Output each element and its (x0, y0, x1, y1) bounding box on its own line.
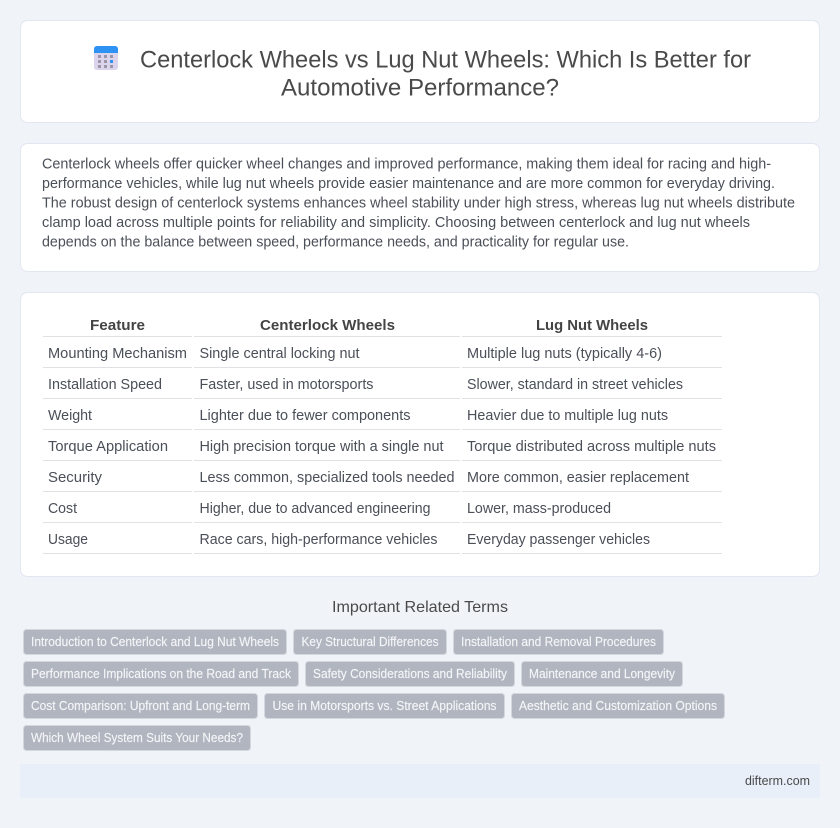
chip (24, 630, 286, 654)
footer: difterm.com (745, 773, 810, 788)
chip: Maintenance and Longevity (529, 667, 676, 681)
table row: cost: Lower, mass-produced (467, 501, 611, 517)
table header: Centerlock Wheels (260, 318, 395, 334)
table row: security: Security (48, 470, 103, 486)
icon: calendar (94, 46, 118, 70)
chip: Performance Implications on the Road and Track (31, 667, 292, 681)
panel: intro text: depends on the balance between speed, performance needs, and practicality for regular use. (42, 234, 629, 250)
chip: Installation and Removal Procedures (461, 635, 656, 649)
related term chips (24, 630, 724, 750)
table row: torque application: Torque distributed across multiple nuts (467, 439, 716, 455)
panel: intro text: clamp load across multiple points for reliability and simplicity. Choosing between centerlock and lug nut wheels (42, 215, 750, 231)
title: Automotive Performance? (281, 74, 559, 102)
table row: security (48, 470, 689, 486)
chip: Safety Considerations and Reliability (313, 667, 508, 681)
chip: Key Structural Differences (302, 635, 438, 649)
footer (20, 764, 820, 798)
table row: installation speed: Slower, standard in street vehicles (467, 377, 683, 393)
panel: intro text: Centerlock wheels offer quicker wheel changes and improved performance, making them ideal for racing and high- (42, 156, 771, 172)
table row: mounting mechanism (48, 346, 662, 362)
panel: title header (20, 20, 820, 122)
table row: usage: Usage (48, 532, 88, 548)
table row: mounting mechanism: Mounting Mechanism (48, 346, 187, 362)
panel: intro text: performance vehicles, while lug nut wheels provide easier maintenance and are more common for everyday driving. (42, 176, 775, 192)
chip (24, 694, 258, 718)
table row: cost: Cost (48, 501, 77, 517)
heading: important related terms: Important Related Terms (332, 599, 508, 616)
table row: mounting mechanism: Single central locking nut (200, 346, 360, 362)
table row: torque application (48, 439, 716, 455)
chip: Which Wheel System Suits Your Needs? (31, 731, 243, 745)
title: Centerlock Wheels vs Lug Nut Wheels: Which Is Better for (140, 46, 751, 74)
table row: cost: Higher, due to advanced engineering (200, 501, 430, 517)
chip: Use in Motorsports vs. Street Applications (272, 699, 496, 713)
table row: usage (48, 532, 650, 548)
panel: comparison table (20, 292, 820, 576)
table header: Lug Nut Wheels (536, 318, 648, 334)
table row: weight: Heavier due to multiple lug nuts (467, 408, 668, 424)
table row: torque application: High precision torque with a single nut (200, 439, 444, 455)
table row: mounting mechanism: Multiple lug nuts (typically 4-6) (467, 346, 662, 362)
table row: usage: Everyday passenger vehicles (467, 532, 650, 548)
table header (90, 318, 648, 334)
chip: Introduction to Centerlock and Lug Nut Wheels (31, 635, 279, 649)
chip (512, 694, 724, 718)
table row: weight: Lighter due to fewer components (200, 408, 410, 424)
table row: usage: Race cars, high-performance vehicles (200, 532, 438, 548)
chip (306, 662, 514, 686)
title (140, 46, 751, 102)
chip (264, 694, 504, 718)
chip: Aesthetic and Customization Options (519, 699, 717, 713)
chip (522, 662, 682, 686)
table row: torque application: Torque Application (48, 439, 168, 455)
chip (24, 726, 250, 750)
table row: weight: Weight (48, 408, 92, 424)
table header: Feature (90, 318, 145, 334)
chip (294, 630, 446, 654)
panel: intro text: The robust design of centerlock systems enhances wheel stability under high stress, whereas lug nut wheels distribute (42, 196, 795, 212)
table row: installation speed: Faster, used in motorsports (200, 377, 374, 393)
chip: Cost Comparison: Upfront and Long-term (31, 699, 250, 713)
table row: security: More common, easier replacement (467, 470, 689, 486)
panel: intro text (20, 144, 820, 272)
table row: cost (48, 501, 611, 517)
chip (24, 662, 298, 686)
chip (454, 630, 664, 654)
table row: installation speed: Installation Speed (48, 377, 162, 393)
table row: installation speed (48, 377, 683, 393)
table row: security: Less common, specialized tools needed (200, 470, 454, 486)
table row: weight (48, 408, 668, 424)
